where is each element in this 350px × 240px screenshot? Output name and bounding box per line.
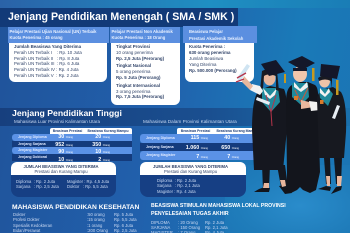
amounts: [16, 179, 59, 189]
panel body: Rp. 5 Juta (Perorang): [116, 75, 160, 80]
amounts: [157, 178, 200, 194]
panel header: Prestasi Akademik Sekolah: [189, 36, 243, 41]
amounts: Doktor : Rp. 5,5 Juta: [67, 184, 108, 189]
panel: UN terbaik: [8, 27, 109, 82]
panel: jumlah beasiswa right: [140, 162, 246, 197]
values prestasi: 115 Orang: [191, 135, 208, 141]
counts: :15 orang: [87, 217, 105, 222]
table header: [50, 128, 132, 134]
background waves: [225, 165, 350, 233]
panel white head: Prestasi dan Kurang Mampu: [164, 169, 217, 174]
panel body: Tingkat Internasional: [116, 83, 160, 88]
values prestasi: 952 Orang: [55, 142, 73, 148]
panel header: [8, 27, 109, 43]
panel header: Pelajar Prestasi Non Akademik: [112, 29, 173, 34]
panel: jumlah beasiswa left: [11, 162, 116, 197]
amounts: Sarjana : Rp. 2,5 Juta: [16, 184, 59, 189]
names: Spesialis Kedokteran: [13, 223, 52, 228]
heading: kesehatan: MAHASISWA PENDIDIKAN KESEHATAN: [12, 204, 139, 210]
panel body: Peraih UN Terbaik II : Rp. 8 Juta: [14, 56, 79, 61]
row sarjana: [140, 142, 261, 151]
panel body: [9, 43, 107, 82]
row magister: [12, 147, 132, 154]
section band: pendidikan tinggi: [0, 108, 350, 126]
title: Jenjang Pendidikan Menengah ( SMA / SMK ): [8, 11, 234, 23]
list: kesehatan: [13, 212, 137, 233]
amounts: Diploma : Rp. 2 Juta: [157, 178, 196, 183]
amounts: Rp. 2 Juta: [205, 220, 224, 224]
values kurang mampu: 40 Orang: [224, 135, 239, 141]
panel body: Peraih UN Terbaik I : Rp. 10 Juta: [14, 50, 82, 55]
names: Profesi Dokter: [13, 217, 40, 222]
amounts: Magister : Rp. 4 Juta: [157, 189, 196, 194]
row magister: [140, 151, 261, 160]
table: dalam provinsi: [140, 128, 258, 160]
panel body: 630 orang penerima: [189, 50, 230, 55]
names: Dokter: [13, 212, 25, 217]
row sarjana: [12, 141, 132, 147]
values kurang mampu: 350 Orang: [92, 142, 110, 148]
list: stimulan: [151, 220, 228, 233]
counts: :1 orang: [87, 223, 102, 228]
names: SARJANA: [151, 225, 170, 230]
heading: stimulan: [151, 203, 286, 217]
column title: Beasiswa Prestasi: [181, 128, 210, 132]
values prestasi: 90 Orang: [58, 149, 73, 155]
values prestasi: 7 Orang: [196, 154, 208, 160]
panel body: Rp. 500.000 (Perorang): [189, 68, 237, 73]
graduate left: [236, 60, 292, 194]
row doktoral: Jenjang Doktoral: [18, 155, 47, 159]
panel base: [140, 166, 246, 196]
panel body: 3 orang penerima: [116, 89, 150, 94]
counts: : 20 Orang: [178, 220, 198, 224]
graduate right: [317, 64, 346, 194]
counts: [178, 220, 200, 233]
panel body: Tingkat Provinsi: [116, 44, 150, 49]
values kurang mampu: 10 Orang: [95, 149, 110, 155]
amounts: Rp. 2,1 Juta: [205, 225, 228, 230]
panel body: 5 orang penerima: [116, 69, 150, 74]
panel body: Rp. 2,5 Juta (Perorang): [116, 56, 164, 61]
panel body: Rp. 7,5 Juta (Perorang): [116, 94, 164, 99]
values prestasi: [55, 134, 73, 163]
amounts: Rp. 6 Juta: [114, 223, 133, 228]
panel header: Pelajar Prestasi Ujian Nasional (UN) Terbaik: [10, 29, 96, 34]
row sarjana: Jenjang Sarjana: [146, 144, 174, 148]
panel white head: Prestasi dan Kurang Mampu: [34, 169, 88, 174]
values prestasi: 10 Orang: [58, 157, 73, 163]
values prestasi: 1.060 Orang: [186, 145, 208, 151]
panel white head: [140, 162, 246, 175]
panel white head: [11, 162, 116, 175]
counts: :200 Orang: [87, 228, 108, 233]
values kurang mampu: 650 Orang: [221, 145, 239, 151]
names: DIPLOMA: [151, 220, 170, 224]
names: [151, 220, 173, 233]
heading: stimulan: PENYELESAIAN TUGAS AKHIR: [151, 211, 229, 217]
row magister: Jenjang Magister: [18, 148, 47, 152]
row diploma: Jenjang Diploma: [18, 135, 47, 139]
graduate middle: [286, 56, 320, 193]
panel body: Peraih UN Terbaik III : Rp. 6 Juta: [14, 61, 79, 66]
panel header: Kuota Penerima : 18 Orang: [112, 35, 165, 40]
amounts: Sarjana : Rp. 2,1 Juta: [157, 183, 200, 188]
panel body: [110, 43, 180, 105]
heading: pendidikan tinggi: Jenjang Pendidikan Tinggi: [12, 108, 122, 118]
table: luar provinsi: [12, 128, 132, 163]
panel header: Kuota Penerima : 45 orang: [10, 35, 63, 40]
column title: Beasiswa Kurang Mampu: [216, 128, 258, 132]
panel header: [183, 26, 257, 43]
values prestasi: [186, 135, 208, 160]
amounts: Magister : Rp. 4,5 Juta: [67, 179, 109, 184]
panel: non akademik: [110, 27, 180, 105]
row diploma: [12, 134, 132, 141]
names: [13, 212, 52, 233]
row diploma: Jenjang Diploma: [146, 136, 175, 140]
row sarjana: Jenjang Sarjana: [18, 142, 46, 146]
values prestasi: 30 Orang: [58, 134, 73, 140]
amounts: [114, 212, 137, 233]
panel body: Yang Diterima: [189, 62, 216, 67]
counts: [87, 212, 108, 233]
row magister: Jenjang Magister: [146, 153, 175, 157]
column title: Beasiswa Prestasi: [53, 128, 82, 132]
panel body: Tingkat Nasional: [116, 63, 151, 68]
top band: [0, 0, 350, 8]
amounts: [67, 179, 110, 189]
row diploma: [140, 134, 261, 142]
amounts: Rp. 5,5 Juta: [114, 217, 137, 222]
panel base: [11, 166, 116, 196]
panel body: Kuota Penerima :: [189, 44, 225, 49]
panel body: Jumlah Beasiswa: [189, 56, 223, 61]
values kurang mampu: 7 Orang: [227, 154, 239, 160]
table header: [177, 128, 261, 134]
values kurang mampu: 20 Orang: [95, 134, 110, 140]
panel body: Jumlah Beasiswa Yang Diterima: [14, 44, 81, 49]
panel body: [185, 43, 254, 82]
panel body: Peraih UN Terbaik IV : Rp. 4 Juta: [14, 67, 79, 72]
amounts: [205, 220, 228, 233]
amounts: Diploma : Rp. 2 Juta: [16, 179, 55, 184]
amounts: Rp. 5 Juta: [114, 212, 133, 217]
panel header: [110, 27, 180, 43]
values kurang mampu: [92, 134, 110, 163]
panel header: Beasiswa Pelajar: [189, 29, 223, 34]
title band: [0, 8, 238, 27]
panel body: 10 orang penerima: [116, 50, 153, 55]
panel: akademik sekolah: [183, 26, 257, 82]
subtitle right: Mahasiswa Dalam Provinsi Kalimantan Utara: [143, 118, 237, 124]
values kurang mampu: 2 Orang: [98, 157, 110, 163]
illustration: graduates: [236, 56, 346, 194]
panel body: Peraih UN Terbaik V : Rp. 2 Juta: [14, 73, 79, 78]
names: Bidan/Perawat: [13, 228, 40, 233]
panel white head: JUMLAH BEASISWA YANG DITERIMA: [24, 164, 98, 168]
heading: stimulan: BEASISWA STIMULAN MAHASISWA LOKAL PROVINSI: [151, 203, 286, 209]
column title: Beasiswa Kurang Mampu: [87, 128, 129, 132]
panel white head: JUMLAH BEASISWA YANG DITERIMA: [153, 164, 228, 168]
values kurang mampu: [221, 135, 239, 160]
counts: : 150 Orang: [178, 225, 200, 230]
counts: :50 orang: [87, 212, 105, 217]
subtitle left: Mahasiswa Luar Provinsi Kalimantan Utara: [14, 118, 100, 124]
row doktoral: [12, 154, 132, 161]
amounts: Rp. 2,5 Juta: [114, 228, 137, 233]
